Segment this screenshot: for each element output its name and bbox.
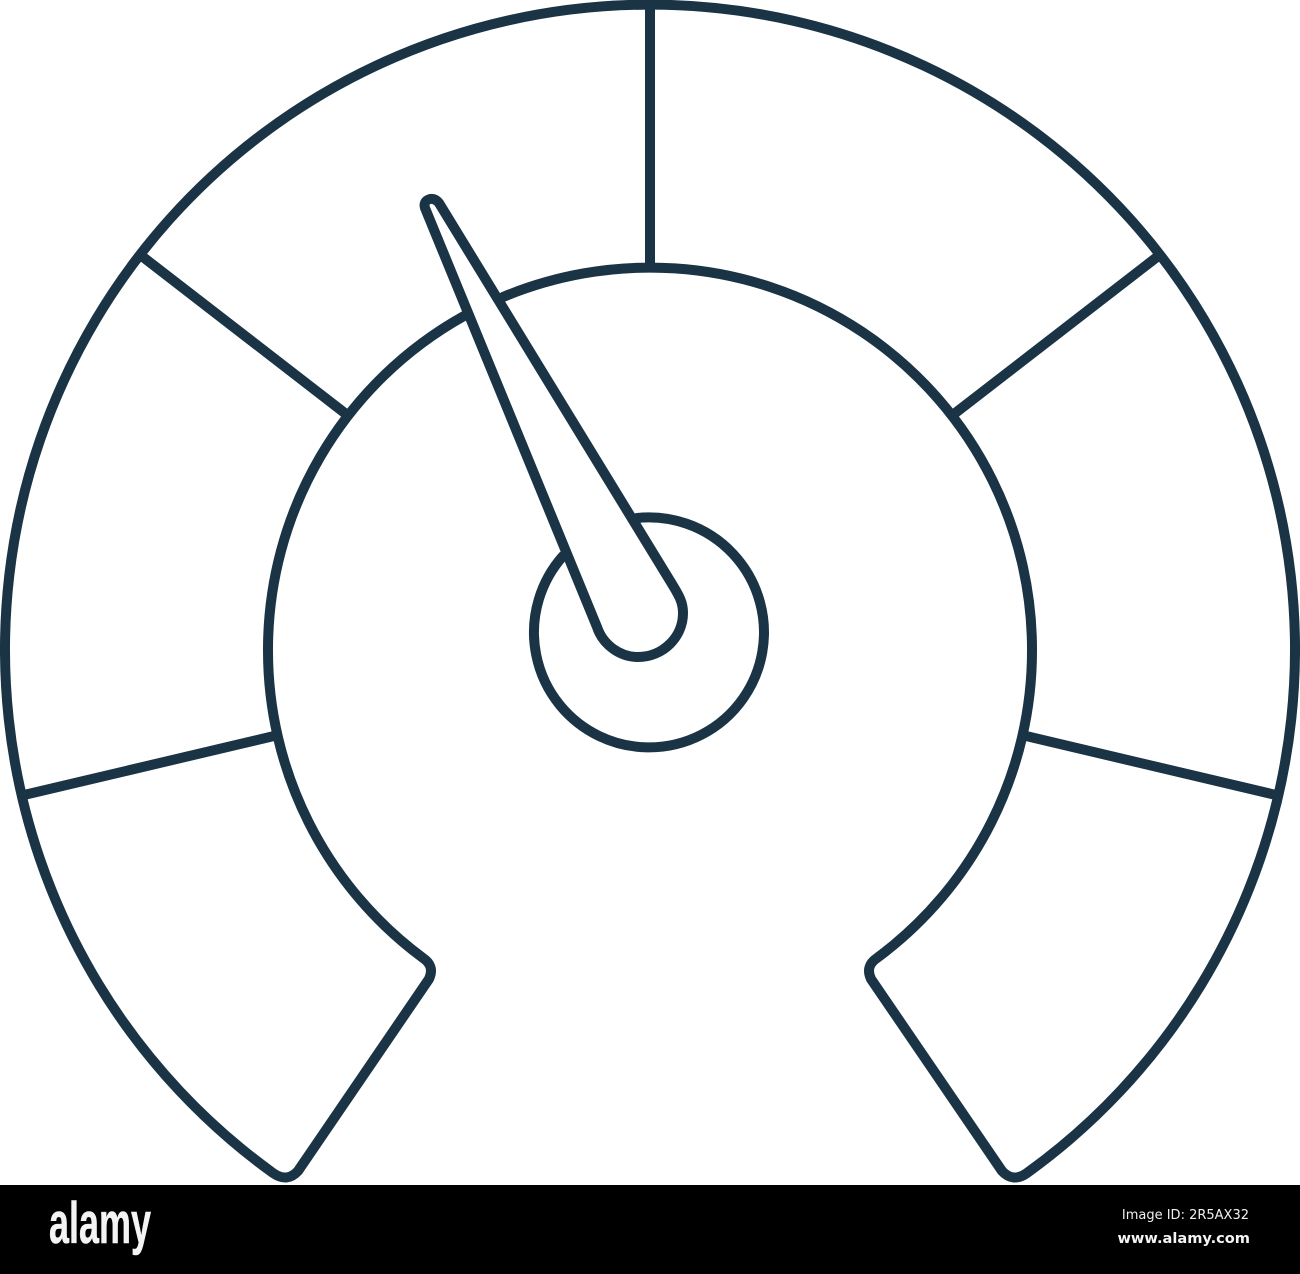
watermark logo: alamy	[49, 1191, 151, 1256]
needle	[425, 199, 683, 657]
image id: Image ID: 2R5AX32	[1122, 1208, 1249, 1223]
website: www.alamy.com	[1117, 1230, 1250, 1247]
footer bar	[0, 1185, 1300, 1274]
center hub	[534, 517, 764, 747]
segment dividers	[24, 6, 1276, 795]
